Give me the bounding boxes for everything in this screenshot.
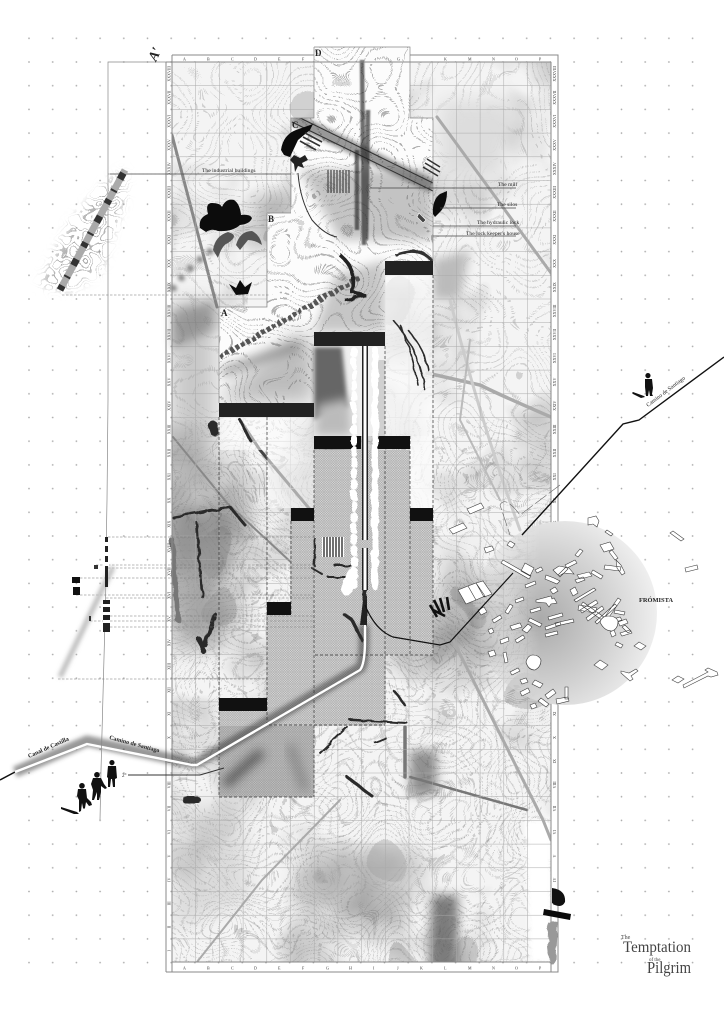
labels of the lock complex: The mill	[498, 182, 518, 188]
labels of the lock complex: The silos	[497, 202, 517, 208]
ruler frames	[166, 55, 558, 972]
lower section strip	[60, 537, 113, 677]
row numerals left: V	[166, 854, 172, 857]
row numerals left: XXVI	[166, 353, 172, 363]
row numerals left: XXI	[166, 473, 172, 480]
row numerals left: XXVII	[166, 328, 172, 340]
town buildings	[449, 503, 632, 709]
row numerals left: XXII	[166, 448, 172, 457]
row numerals right: XXXIV	[552, 162, 557, 175]
town round buildings	[526, 616, 618, 670]
panel outlines	[219, 47, 433, 403]
town name: FRÓMISTA	[639, 596, 673, 604]
camino label left: Camino de Santiago	[108, 735, 160, 754]
arm	[546, 922, 558, 965]
row numerals right: III	[552, 901, 557, 905]
row numerals right: XXXI	[552, 234, 557, 245]
row numerals right: XV	[552, 616, 557, 622]
outlying buildings	[594, 531, 718, 688]
camino label right: Camino de Santiago	[646, 375, 687, 409]
row numerals right: XXXVIII	[552, 65, 557, 82]
labels of the lock complex: The industrial buildings	[202, 168, 255, 174]
row numerals right: XXII	[552, 448, 557, 457]
map panel	[172, 47, 551, 975]
row numerals right: X	[552, 736, 557, 739]
lower white strips	[219, 275, 433, 508]
labels of the lock complex: The lock keeper's house	[466, 231, 520, 237]
row numerals left: XXIX	[166, 282, 172, 292]
town of Fromista	[449, 503, 718, 709]
panel letters: D	[315, 48, 322, 58]
leader lines	[110, 174, 516, 236]
row numerals left: IV	[166, 877, 172, 882]
row numerals right: XI	[552, 711, 557, 716]
map base tone	[172, 62, 551, 975]
pilgrim 3	[61, 783, 92, 814]
dark ink details on map	[172, 320, 428, 800]
dashed section outlines	[219, 275, 433, 797]
row numerals left: XIII	[166, 662, 172, 670]
row numerals left: XVI	[166, 591, 172, 599]
row numerals left: XXIII	[166, 424, 172, 434]
diagonal canal band	[292, 118, 433, 187]
row numerals right: IX	[552, 759, 557, 763]
title	[621, 935, 691, 977]
row numerals right: II	[552, 925, 557, 928]
narrow canal	[362, 346, 368, 590]
silos lower	[322, 537, 344, 557]
row numerals left: I	[166, 949, 172, 951]
strip body	[60, 170, 125, 290]
column letters bottom: ABCDEFGHIJKLMNOP	[183, 966, 542, 970]
row numerals left: XXXII	[166, 210, 172, 222]
row numerals right: XXV	[552, 378, 557, 386]
lower diagonal band	[220, 277, 360, 357]
row numerals right: VIII	[552, 781, 557, 788]
title: of the	[649, 958, 661, 963]
row numerals right: XVI	[552, 591, 557, 599]
vertical mill smear	[357, 60, 368, 245]
row numerals right: XXIV	[552, 401, 557, 411]
panel letters: B	[268, 214, 274, 224]
black bar	[543, 909, 571, 920]
upper section strip with trees	[38, 168, 131, 295]
row numerals left: XXXIV	[166, 162, 172, 175]
row numerals right: XXVI	[552, 353, 557, 363]
panels A B C D: white contour sheets	[219, 47, 433, 403]
section blocks	[103, 537, 110, 632]
dashed projection lines	[58, 174, 314, 679]
row numerals left: III	[166, 901, 172, 905]
face and bar at map edge	[543, 888, 571, 965]
row numerals left: XXV	[166, 378, 172, 386]
row numerals right: XII	[552, 687, 557, 693]
row numerals left: XXXVII	[166, 90, 172, 105]
hatched section	[219, 450, 433, 797]
row numerals left: XV	[166, 616, 172, 622]
canal white banks	[347, 350, 375, 590]
row numerals left: XXXIII	[166, 185, 172, 199]
title: Pilgrim	[647, 958, 691, 977]
north marker: A′	[146, 45, 165, 65]
ink splat top	[200, 200, 252, 232]
row numerals left: VII	[166, 805, 172, 811]
row numerals left: XIX	[166, 521, 172, 528]
small route line	[122, 768, 224, 779]
row numerals right: XXXVI	[552, 114, 557, 128]
grid lines	[172, 62, 551, 962]
row numerals right: XIII	[552, 662, 557, 670]
row numerals left: X	[166, 736, 172, 739]
labels of the lock complex	[110, 168, 520, 237]
row numerals right: XXXVII	[552, 90, 557, 105]
black ink: hands and splats	[200, 124, 449, 625]
title: Temptation	[623, 939, 691, 956]
pilgrims group	[61, 760, 117, 814]
row numerals right: XXI	[552, 473, 557, 480]
pilgrim 2	[91, 772, 107, 800]
row numerals right	[552, 65, 557, 951]
row numerals right: V	[552, 854, 557, 857]
road lines	[172, 117, 551, 962]
labels of the lock complex: The hydraulic lock	[477, 220, 519, 226]
row numerals right: XIV	[552, 639, 557, 646]
row numerals left: XXXV	[166, 139, 172, 151]
row numerals left: XVII	[166, 567, 172, 576]
row numerals right: XXIII	[552, 424, 557, 434]
small route line: 2°	[122, 774, 126, 779]
black section bars	[219, 261, 433, 711]
left section axis	[100, 62, 166, 820]
row numerals left: XXXVI	[166, 114, 172, 128]
row numerals right: IV	[552, 877, 557, 882]
row numerals right: XVIII	[552, 542, 557, 553]
town gradient disc	[473, 521, 657, 705]
row numerals left: II	[166, 925, 172, 928]
pilgrim top right	[632, 373, 653, 398]
row numerals left: XI	[166, 711, 172, 716]
silos top	[328, 170, 349, 193]
title: The	[621, 935, 631, 941]
row numerals left	[166, 65, 172, 951]
row numerals right: XIX	[552, 521, 557, 528]
row numerals left: XXVIII	[166, 304, 172, 317]
row numerals right: XXIX	[552, 282, 557, 292]
hair	[552, 888, 565, 906]
row numerals left: XXX	[166, 259, 172, 268]
row numerals left: XXXVIII	[166, 65, 172, 82]
row numerals right: VII	[552, 805, 557, 811]
row numerals left: XXIV	[166, 401, 172, 411]
row numerals left: XXXI	[166, 234, 172, 245]
row numerals right: XVII	[552, 567, 557, 576]
row numerals left: XII	[166, 687, 172, 693]
row numerals right: XX	[552, 498, 557, 503]
row numerals left: IX	[166, 759, 172, 763]
row numerals right: XXX	[552, 259, 557, 268]
rulers	[166, 55, 558, 972]
canal label: Canal de Castilla	[27, 736, 70, 760]
row numerals right: XXXV	[552, 139, 557, 151]
row numerals right: XXXIII	[552, 185, 557, 199]
panel letters: A	[221, 308, 228, 318]
row numerals right: VI	[552, 830, 557, 834]
row numerals left: XX	[166, 498, 172, 503]
row numerals left: VIII	[166, 781, 172, 788]
panel letters	[221, 48, 322, 318]
pilgrim 1	[107, 760, 117, 787]
canal de Castilla	[0, 625, 365, 780]
row numerals left: VI	[166, 830, 172, 834]
panel letters: C	[292, 120, 298, 130]
row numerals left: XVIII	[166, 542, 172, 553]
row numerals right: XXVII	[552, 328, 557, 340]
scribbled trees	[38, 168, 131, 295]
row numerals right: I	[552, 949, 557, 951]
row numerals right: XXVIII	[552, 304, 557, 317]
column letters top: ABCDEFGKMNOP	[183, 56, 542, 62]
row numerals right: XXXII	[552, 210, 557, 222]
row numerals left: XIV	[166, 639, 172, 646]
camino de Santiago black route	[365, 357, 724, 645]
